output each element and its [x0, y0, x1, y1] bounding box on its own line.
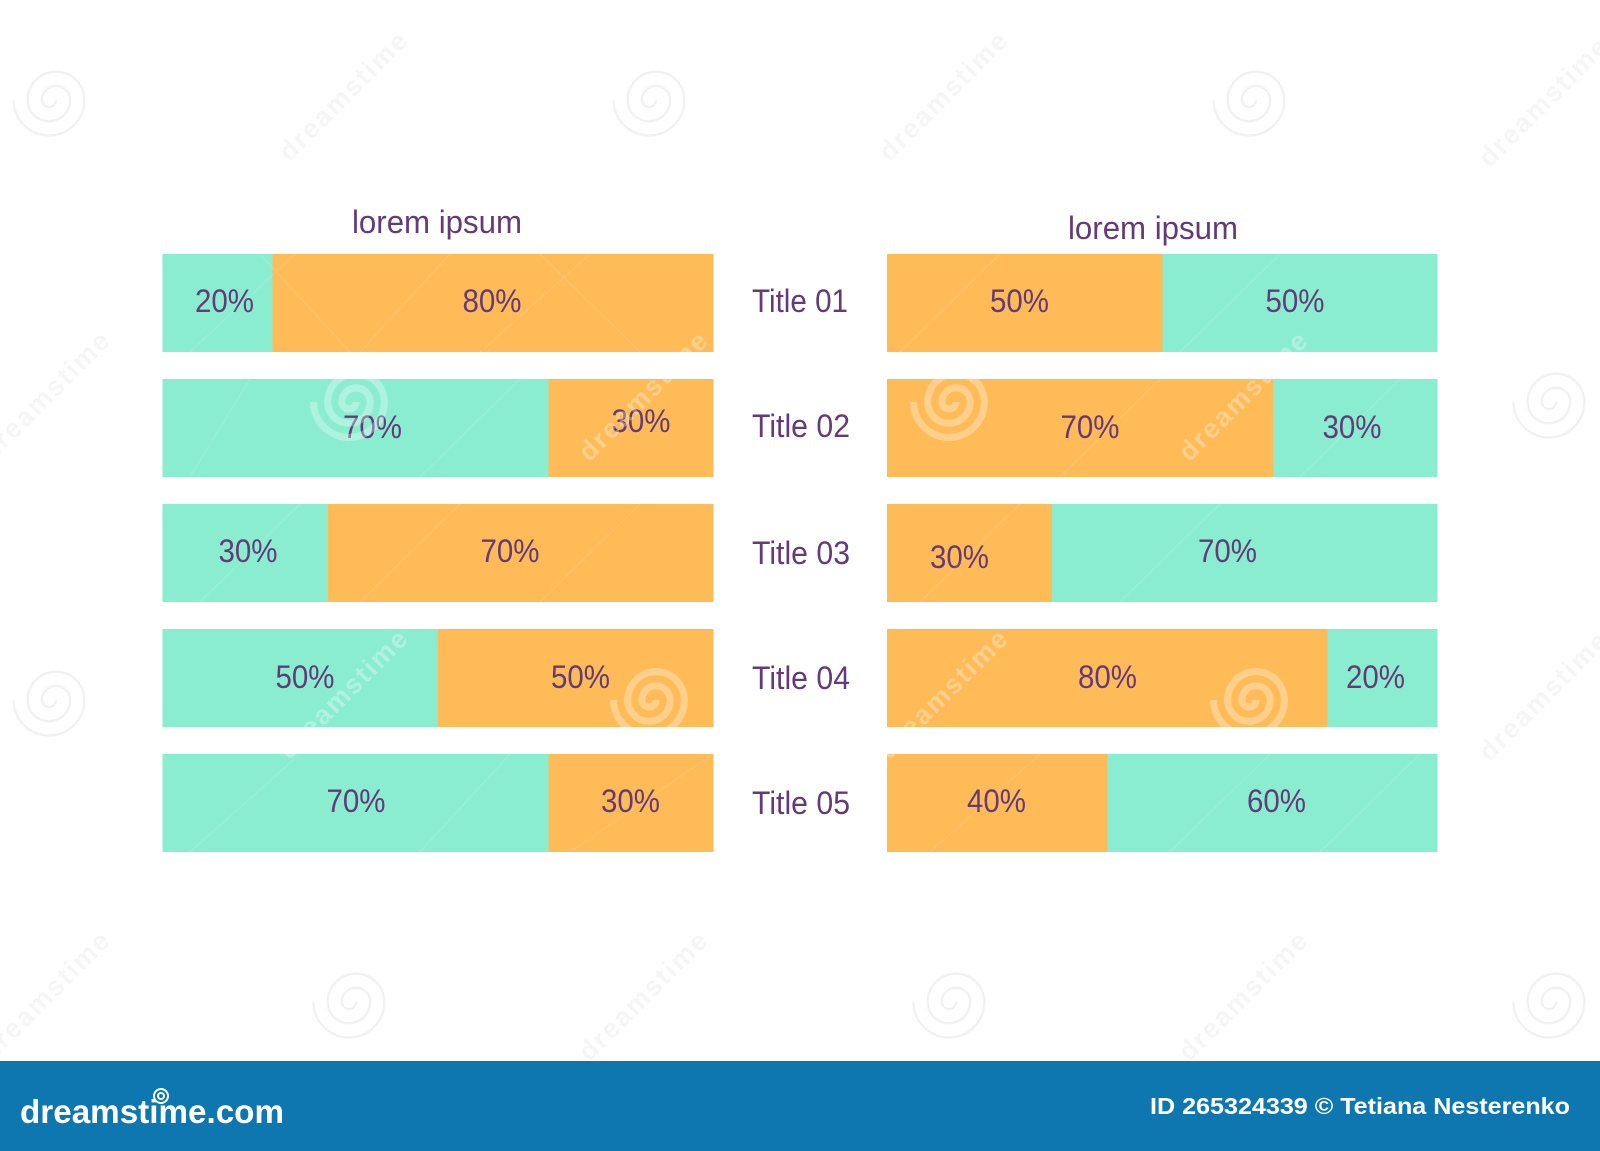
heading: right lorem ipsum: lorem ipsum — [1068, 210, 1238, 246]
left bar row 4: 50% — [276, 659, 334, 695]
icon: logo spiral — [154, 1089, 168, 1103]
left bar row 2: 70% — [343, 409, 402, 445]
right bar row 2 — [887, 379, 1438, 477]
left bar row 4: 50% — [551, 659, 610, 695]
watermarks over bars: dreamstime — [1172, 324, 1315, 467]
right bar row 3: 70% — [1198, 533, 1257, 569]
title 01: Title 01 — [752, 283, 848, 319]
left bar row 5 — [162, 754, 714, 852]
title 04: Title 04 — [752, 660, 850, 696]
right bar row 1: 50% — [1266, 283, 1324, 319]
left bar row 1: 80% — [462, 283, 522, 319]
title 05: Title 05 — [752, 785, 850, 821]
image id and credit: ID 265324339 © Tetiana Nesterenko — [1150, 1093, 1570, 1119]
watermarks over bars — [190, 254, 1420, 852]
right bar row 5: 60% — [1247, 783, 1306, 819]
right bar row 3 — [887, 504, 1438, 602]
left bar row 3: 30% — [218, 533, 278, 569]
left bar row 1 — [162, 254, 714, 352]
left bar row 3: 70% — [480, 533, 540, 569]
watermarks over bars: dreamstime — [872, 622, 1015, 765]
title 03: Title 03 — [752, 535, 850, 571]
right bar row 5: 40% — [967, 783, 1026, 819]
left bar row 2: 30% — [612, 403, 670, 439]
right bar row 2: 30% — [1322, 409, 1382, 445]
panel: right chart — [887, 210, 1438, 852]
right bar row 4: 20% — [1346, 659, 1405, 695]
watermarks over bars: dreamstime — [572, 324, 715, 467]
left bar row 4 — [162, 629, 714, 727]
panel: left chart — [162, 204, 714, 852]
watermarks on white background: dreamstime — [272, 24, 415, 167]
right bar row 2: 70% — [1060, 409, 1120, 445]
right bar row 5 — [887, 754, 1438, 852]
left bar row 5: 30% — [601, 783, 660, 819]
dreamstime logo: dreamstime.com — [20, 1093, 284, 1130]
right bar row 1: 50% — [990, 283, 1049, 319]
right bar row 4 — [887, 629, 1438, 727]
row titles — [752, 283, 850, 821]
left bar row 1: 20% — [195, 283, 254, 319]
right bar row 3: 30% — [930, 539, 989, 575]
right bar row 4: 80% — [1078, 659, 1137, 695]
watermarks on white background: dreamstime — [872, 24, 1015, 167]
left bar row 5: 70% — [326, 783, 386, 819]
title 02: Title 02 — [752, 408, 850, 444]
left bar row 2 — [162, 379, 714, 477]
right bar row 1 — [887, 254, 1438, 352]
watermarks on white background: dreamstime — [1172, 924, 1315, 1067]
watermarks over bars: dreamstime — [272, 622, 415, 765]
heading: left lorem ipsum: lorem ipsum — [352, 204, 522, 240]
watermarks on white background: dreamstime — [572, 924, 715, 1067]
footer banner — [0, 1061, 1600, 1151]
left bar row 3 — [162, 504, 714, 602]
